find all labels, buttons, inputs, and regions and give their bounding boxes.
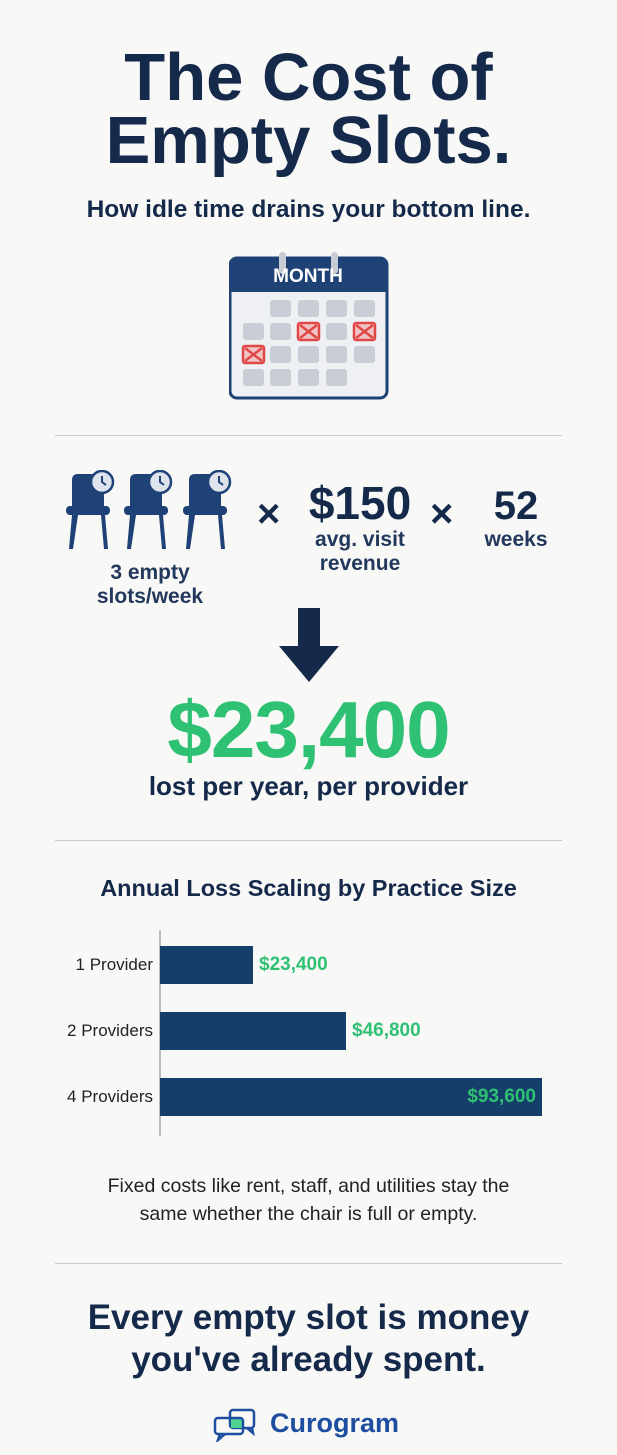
- title: [106, 40, 511, 178]
- factor: $150: revenue: [320, 552, 400, 575]
- tagline: you've already spent.: [131, 1340, 486, 1379]
- title: Empty Slots.: [106, 103, 511, 178]
- logo: Curogram: [214, 1408, 399, 1442]
- multiply sign 2: ×: [430, 492, 453, 536]
- factor: 52 weeks: [484, 484, 548, 551]
- arrow down: [279, 608, 339, 682]
- result caption: lost per year, per provider: [149, 771, 468, 801]
- factor label: 3 empty slots: [97, 561, 203, 608]
- result total: $23,400: [167, 685, 450, 774]
- logo: Curogram: Curogram: [270, 1408, 399, 1438]
- factor: $150: [309, 477, 411, 575]
- multiply sign 1: ×: [257, 492, 280, 536]
- factor label: 3 empty slots: slots/week: [97, 585, 203, 608]
- factor: 52 weeks: 52: [494, 484, 538, 528]
- bar: 4 providers: 4 Providers: [67, 1087, 153, 1106]
- note text: [108, 1175, 509, 1225]
- icon: calendar: MONTH: [273, 266, 343, 287]
- bar: 2 providers: $46,800: [352, 1020, 421, 1041]
- icon: three chairs with clocks: [66, 470, 232, 549]
- tagline: Every empty slot is money: [88, 1298, 529, 1337]
- bar: 2 providers: 2 Providers: [67, 1021, 153, 1040]
- factor: $150: avg. visit: [315, 528, 405, 551]
- bar chart: [67, 930, 542, 1136]
- factor: 52 weeks: weeks: [484, 528, 548, 551]
- chart title: Annual Loss Scaling by Practice Size: [100, 875, 517, 901]
- tagline: [88, 1298, 529, 1379]
- bar: 1 provider: $23,400: [259, 954, 328, 975]
- note text: Fixed costs like rent, staff, and utilities stay the: [108, 1175, 509, 1197]
- bar: 1 provider: [76, 946, 328, 984]
- icon: calendar: [229, 252, 388, 400]
- factor label: 3 empty slots: 3 empty: [110, 561, 190, 584]
- note text: same whether the chair is full or empty.: [140, 1203, 477, 1225]
- bar: 4 providers: [67, 1078, 542, 1116]
- factor: $150: $150: [309, 477, 411, 529]
- bar: 4 providers: $93,600: [467, 1086, 536, 1107]
- subtitle: How idle time drains your bottom line.: [87, 196, 530, 223]
- bar: 2 providers: [67, 1012, 421, 1050]
- title: The Cost of: [124, 40, 493, 115]
- bar: 1 provider: 1 Provider: [76, 955, 153, 974]
